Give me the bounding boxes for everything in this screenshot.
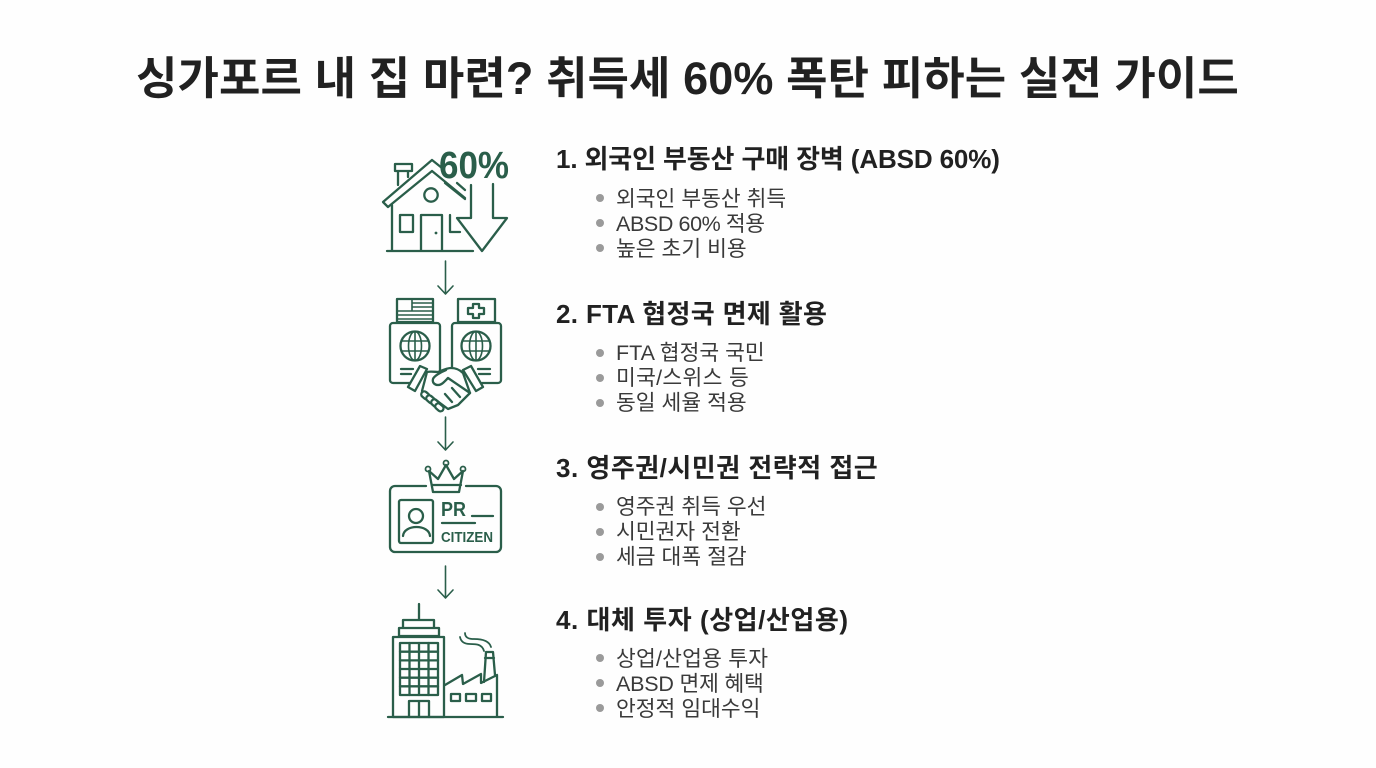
section 4 list: [596, 647, 768, 721]
icon: PR citizen card with crown: CITIZEN: [441, 530, 493, 546]
section 3 list: 영주권 취득 우선: [616, 495, 766, 519]
icon: office tower and factory: [388, 604, 503, 717]
section 2 list: [596, 341, 765, 415]
section 1 list: ABSD 60% 적용: [616, 212, 765, 236]
icon: PR citizen card with crown: PR: [441, 499, 466, 521]
section 3 list: [596, 495, 766, 569]
section 1 list: [596, 187, 786, 261]
section 1 heading: 1. 외국인 부동산 구매 장벽 (ABSD 60%): [556, 144, 1000, 174]
section 4 list: 안정적 임대수익: [616, 697, 760, 721]
icon: passports and handshake: [390, 299, 501, 413]
icon: PR citizen card with crown: [390, 460, 501, 552]
title: 싱가포르 내 집 마련? 취득세 60% 폭탄 피하는 실전 가이드: [136, 53, 1239, 104]
arrow 3 to 4: [438, 566, 453, 598]
section 1 list: 외국인 부동산 취득: [616, 187, 786, 211]
section 4 list: 상업/산업용 투자: [616, 647, 768, 671]
arrow 2 to 3: [438, 417, 453, 450]
section 4 list: ABSD 면제 혜택: [616, 672, 764, 696]
section 4 heading: 4. 대체 투자 (상업/산업용): [556, 605, 849, 635]
section 2 list: 미국/스위스 등: [616, 366, 749, 390]
section 3 list: 시민권자 전환: [616, 520, 741, 544]
section 2 heading: 2. FTA 협정국 면제 활용: [556, 299, 827, 329]
icon: house with 60% down arrow: [383, 145, 509, 251]
section 3 list: 세금 대폭 절감: [616, 545, 747, 569]
section 2 list: 동일 세율 적용: [616, 391, 747, 415]
icon: house with 60% down arrow: 60%: [439, 145, 509, 187]
section 3 heading: 3. 영주권/시민권 전략적 접근: [556, 453, 878, 483]
section 1 list: 높은 초기 비용: [616, 237, 747, 261]
arrow 1 to 2: [438, 261, 453, 294]
section 2 list: FTA 협정국 국민: [616, 341, 765, 365]
